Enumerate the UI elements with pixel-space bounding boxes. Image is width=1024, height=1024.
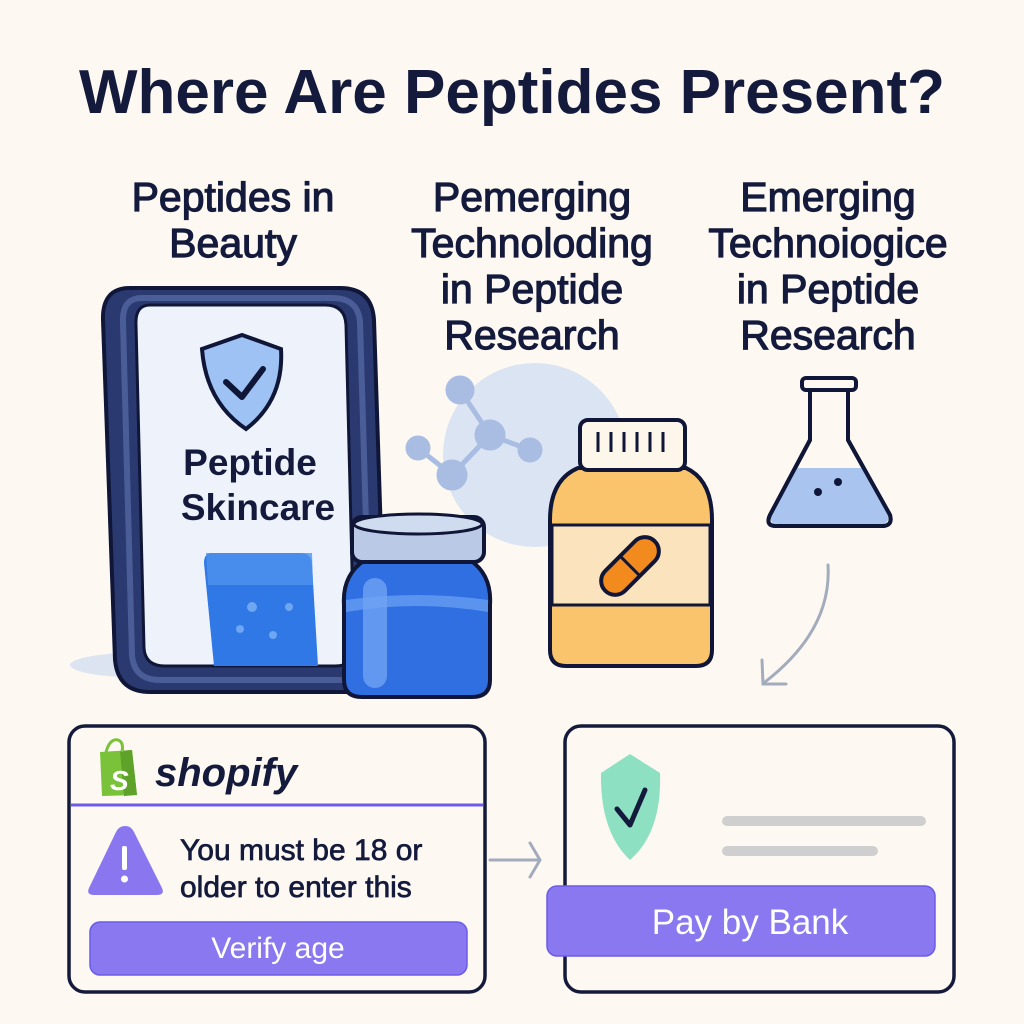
illustration: flask <box>768 378 891 526</box>
shadow under phone <box>70 652 230 678</box>
heading: peptides in beauty: Peptides in <box>132 174 334 220</box>
heading: emerging tech 1: in Peptide <box>441 266 623 312</box>
heading: peptides in beauty <box>132 174 334 266</box>
button: verify age <box>90 922 467 975</box>
heading: emerging tech 1 <box>411 174 653 358</box>
heading: emerging tech 1: Research <box>444 312 620 358</box>
shopify wordmark: shopify <box>155 751 299 795</box>
icon: shopify bag <box>100 740 137 796</box>
icon: shield check <box>202 335 281 429</box>
button: pay by bank <box>547 886 935 956</box>
button: pay by bank: Pay by Bank <box>652 903 849 942</box>
heading: emerging tech 2: Emerging <box>740 174 916 220</box>
panel: shopify age gate: older to enter this <box>180 871 412 904</box>
heading: emerging tech 1: Technoloding <box>411 220 653 266</box>
illustration: phone <box>103 288 385 692</box>
title: Where Are Peptides Present? <box>79 58 945 127</box>
icon: teal shield check <box>601 754 660 860</box>
warning text: You must be 18 or <box>180 834 422 867</box>
icon: shopify bag: S <box>110 765 129 796</box>
heading: peptides in beauty: Beauty <box>169 220 297 266</box>
illustration: phone: Skincare <box>181 487 335 528</box>
arrow: right <box>490 843 540 877</box>
icon: warning triangle <box>88 826 163 895</box>
heading: emerging tech 1: Pemerging <box>433 174 631 220</box>
illustration: blue jar <box>344 514 490 697</box>
panel: shopify age gate <box>69 726 485 992</box>
illustration: supplement bottle <box>550 420 712 666</box>
heading: emerging tech 2: Technoiogice <box>708 220 948 266</box>
arrow: curved down <box>762 565 828 684</box>
illustration: molecule background circle <box>408 363 627 547</box>
heading: emerging tech 2 <box>708 174 948 358</box>
heading: emerging tech 2: in Peptide <box>737 266 919 312</box>
placeholder lines <box>727 821 921 851</box>
heading: emerging tech 2: Research <box>740 312 916 358</box>
button: verify age: Verify age <box>211 932 345 965</box>
panel: pay by bank <box>547 726 954 992</box>
phone text: Peptide <box>183 442 317 483</box>
icon: capsule <box>595 531 665 601</box>
